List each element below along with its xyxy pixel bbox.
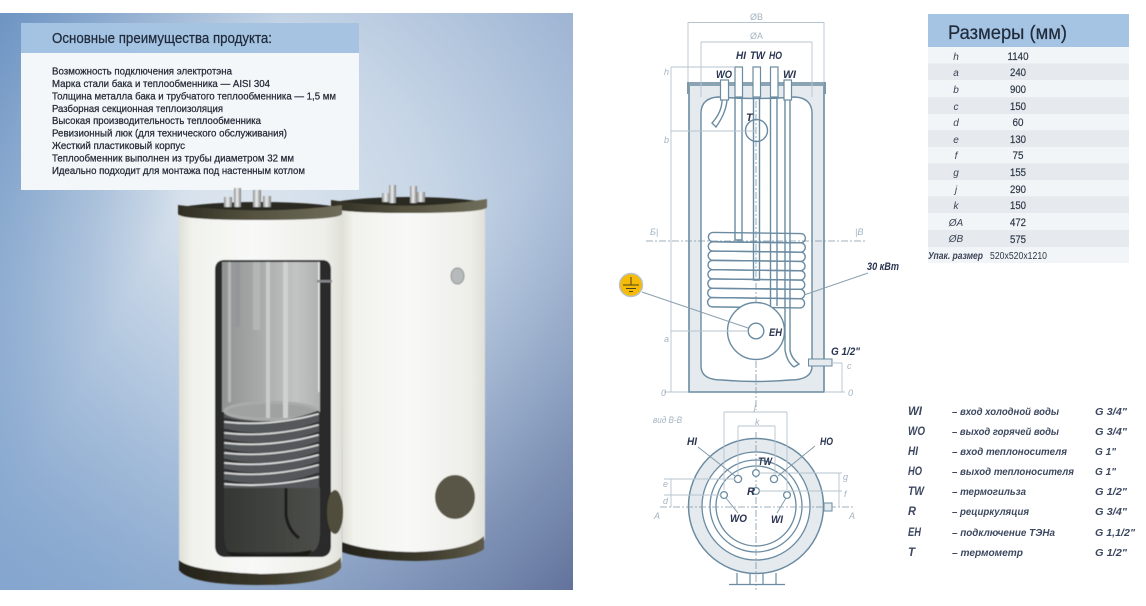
tank rings bbox=[688, 438, 824, 574]
table values: 520x520x1210 bbox=[990, 251, 1047, 262]
internal pipes bbox=[712, 97, 799, 367]
advantages list: Жесткий пластиковый корпус bbox=[52, 141, 185, 152]
connection labels: HO bbox=[769, 50, 782, 62]
connection labels: T bbox=[746, 112, 754, 124]
advantages list: Разборная секционная теплоизоляция bbox=[52, 103, 223, 115]
legend codes bbox=[908, 406, 925, 559]
photo: cutaway water tank bbox=[178, 188, 343, 585]
connection labels: HI bbox=[736, 50, 747, 62]
advantages list: Ревизионный люк (для технического обслуживания) bbox=[52, 128, 287, 140]
connection labels: WO bbox=[730, 513, 747, 525]
table values: 150 bbox=[1010, 200, 1026, 212]
connectors bbox=[382, 185, 425, 203]
leader: heat exchanger power bbox=[804, 273, 868, 295]
heat exchanger coil drawing bbox=[708, 232, 805, 308]
advantages list: Толщина металла бака и трубчатого теплообменника — 1,5 мм bbox=[52, 90, 336, 102]
advantages list: Высокая производительность теплообменника bbox=[52, 115, 261, 127]
legend: connections bbox=[908, 406, 1136, 559]
flange cover bbox=[435, 475, 475, 519]
legend codes: R bbox=[908, 506, 917, 518]
side flange bbox=[327, 490, 343, 534]
table: dimensions bbox=[928, 14, 1129, 263]
panel heading: Основные преимущества продукта: bbox=[52, 30, 272, 47]
table values: 575 bbox=[1010, 234, 1026, 246]
advantages list: Возможность подключения электротэна bbox=[52, 66, 232, 78]
icon: ground symbol bbox=[620, 274, 642, 296]
tank body with insulation bbox=[687, 82, 826, 392]
center line bbox=[755, 75, 757, 410]
table row labels: b bbox=[953, 85, 959, 96]
legend descriptions: – вход теплоносителя bbox=[952, 446, 1067, 458]
legend thread sizes: G 1" bbox=[1095, 466, 1117, 478]
dimension letters: A bbox=[848, 511, 855, 521]
table row labels: d bbox=[953, 118, 959, 129]
dimension labels: 0 bbox=[661, 388, 666, 398]
connection labels: HO bbox=[820, 436, 833, 448]
legend codes: HO bbox=[908, 466, 922, 478]
connection labels: WI bbox=[783, 69, 797, 81]
leader lines and dimensions bbox=[664, 412, 842, 513]
legend descriptions: – выход горячей воды bbox=[952, 426, 1059, 438]
table row labels: c bbox=[954, 102, 958, 113]
table values: 240 bbox=[1010, 67, 1026, 79]
table row labels: f bbox=[955, 151, 959, 162]
table values: 75 bbox=[1012, 150, 1024, 162]
side stub bbox=[824, 503, 832, 511]
connection labels: EH bbox=[769, 327, 783, 339]
table values: 472 bbox=[1010, 217, 1026, 229]
leader: ground bbox=[642, 292, 748, 328]
heat exchanger coil body bbox=[224, 412, 319, 488]
legend descriptions: – выход теплоносителя bbox=[952, 466, 1074, 478]
legend thread sizes: G 3/4" bbox=[1095, 406, 1128, 418]
heat exchanger coil bbox=[225, 412, 318, 485]
legend codes: T bbox=[908, 547, 916, 559]
legend codes: WO bbox=[908, 426, 925, 438]
dimension letters: d bbox=[663, 496, 669, 506]
table row labels: a bbox=[953, 68, 959, 79]
dimension letters: e bbox=[663, 479, 668, 489]
table row labels: e bbox=[953, 135, 959, 146]
legend descriptions: – термогильза bbox=[952, 486, 1026, 498]
legend descriptions: – вход холодной воды bbox=[952, 406, 1059, 418]
legend descriptions: – рециркуляция bbox=[952, 506, 1029, 518]
dimension labels: b bbox=[664, 135, 669, 145]
table row labels: ØB bbox=[948, 234, 964, 245]
table row labels: Упак. размер bbox=[928, 251, 983, 262]
dimension lines bbox=[664, 22, 845, 392]
table row labels: j bbox=[953, 185, 958, 196]
heating element flange bbox=[728, 302, 784, 360]
connection labels: G 1/2" bbox=[831, 346, 861, 358]
table values: 1140 bbox=[1008, 51, 1028, 63]
technical drawing: top view B-B bbox=[653, 402, 855, 590]
table row labels: ØA bbox=[948, 218, 964, 229]
connection labels: WO bbox=[716, 69, 732, 81]
dimension labels: 0 bbox=[848, 388, 853, 398]
legend descriptions: – термометр bbox=[952, 547, 1024, 559]
table row labels: h bbox=[953, 52, 959, 63]
product photo background bbox=[0, 13, 573, 590]
table values: 900 bbox=[1010, 84, 1026, 96]
connection labels: TW bbox=[758, 456, 773, 468]
legend thread sizes: G 1/2" bbox=[1095, 547, 1128, 559]
legend thread sizes: G 3/4" bbox=[1095, 506, 1128, 518]
table stripes bbox=[928, 47, 1129, 263]
table row labels: g bbox=[953, 168, 959, 179]
legend thread sizes bbox=[1095, 406, 1136, 559]
dimension labels bbox=[650, 12, 863, 398]
cutaway opening bbox=[215, 260, 332, 557]
technical drawing: side section bbox=[620, 12, 899, 410]
advantages list: Теплообменник выполнен из трубы диаметром 32 мм bbox=[52, 152, 294, 164]
recirculation stub bbox=[808, 359, 832, 366]
dimension labels: h bbox=[664, 67, 669, 77]
dimension letters: f bbox=[844, 489, 848, 499]
dimension letters bbox=[653, 402, 855, 521]
table values bbox=[990, 51, 1047, 262]
dimension labels: |B bbox=[855, 227, 863, 237]
dimension labels: a bbox=[664, 334, 669, 344]
connection labels bbox=[687, 436, 833, 526]
table values: 155 bbox=[1010, 167, 1026, 179]
connector fittings bbox=[720, 67, 792, 100]
table values: 60 bbox=[1012, 117, 1024, 129]
cold water tube bbox=[286, 488, 299, 538]
table values: 290 bbox=[1010, 184, 1026, 196]
table values: 130 bbox=[1010, 134, 1026, 146]
table row labels: k bbox=[954, 201, 960, 212]
panel: product advantages bbox=[21, 23, 359, 190]
dimension letters: k bbox=[755, 417, 760, 427]
connection labels: HI bbox=[687, 436, 698, 448]
table header bbox=[928, 14, 1129, 47]
dimension letters: A bbox=[653, 511, 660, 521]
photo: closed water tank bbox=[331, 185, 487, 561]
dimension labels: ØB bbox=[750, 12, 763, 22]
internal pipes bbox=[225, 262, 332, 420]
dimension labels: c bbox=[847, 361, 852, 371]
legend codes: TW bbox=[908, 486, 925, 498]
tank feet bbox=[729, 573, 785, 584]
connection labels: 30 кВт bbox=[867, 261, 899, 273]
thermometer dial bbox=[451, 268, 464, 284]
dimension labels: ØA bbox=[750, 31, 763, 41]
dimension letters: j bbox=[753, 402, 757, 412]
legend thread sizes: G 1" bbox=[1095, 446, 1117, 458]
connectors bbox=[224, 188, 271, 207]
legend thread sizes: G 1/2" bbox=[1095, 486, 1128, 498]
legend thread sizes: G 1,1/2" bbox=[1095, 527, 1136, 539]
connection holes bbox=[721, 470, 790, 498]
legend descriptions bbox=[952, 406, 1074, 559]
thermometer circle bbox=[746, 120, 768, 142]
advantages list: Идеально подходит для монтажа под настенным котлом bbox=[52, 166, 305, 177]
dimension labels: Б| bbox=[650, 227, 658, 237]
connection labels: R bbox=[747, 486, 755, 498]
legend codes: WI bbox=[908, 406, 923, 418]
section line B-B bbox=[646, 240, 867, 242]
view label: вид В-В bbox=[653, 415, 682, 425]
connection labels bbox=[716, 50, 899, 358]
table header: Размеры (мм) bbox=[948, 23, 1067, 44]
table row labels bbox=[928, 52, 983, 262]
legend codes: HI bbox=[908, 446, 919, 458]
table values: 150 bbox=[1010, 101, 1026, 113]
connection labels: TW bbox=[750, 50, 766, 62]
dimension letters: g bbox=[843, 472, 848, 482]
legend thread sizes: G 3/4" bbox=[1095, 426, 1128, 438]
advantages list bbox=[52, 66, 336, 177]
advantages list: Марка стали бака и теплообменника — AISI 304 bbox=[52, 78, 270, 90]
legend codes: EH bbox=[908, 527, 922, 539]
legend descriptions: – подключение ТЭНа bbox=[952, 527, 1055, 539]
connection labels: WI bbox=[771, 514, 784, 526]
